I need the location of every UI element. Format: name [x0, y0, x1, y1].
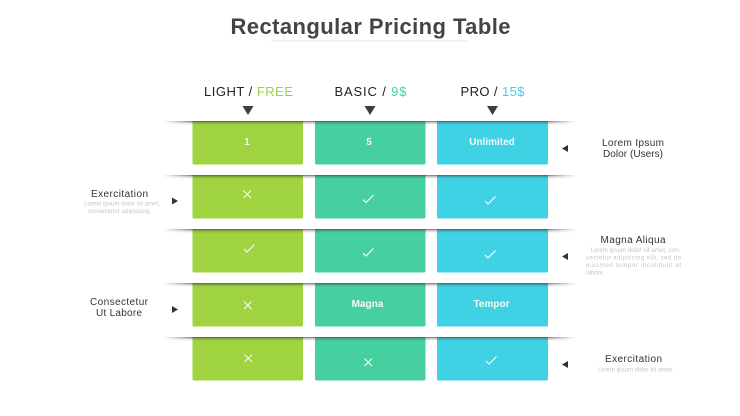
right label: magna aliqua: sectetur adipiscing elit, sed do [586, 256, 682, 262]
right label: users [602, 138, 664, 160]
left label: exercitation: Lorem ipsum dolor sit amet, [84, 202, 160, 208]
column header: basic [334, 84, 407, 115]
column header: pro: PRO / 15$ [460, 84, 525, 99]
arrow: consectetur [172, 306, 178, 313]
arrow: magna aliqua [562, 253, 568, 260]
left label: consectetur [90, 297, 149, 319]
column header: light: LIGHT / FREE [204, 84, 293, 99]
left label: exercitation: consectetur adipiscing. [88, 209, 151, 215]
right label: magna aliqua: Magna Aliqua [600, 235, 666, 246]
arrow: users [562, 145, 568, 152]
card values: Magna [352, 299, 384, 310]
card values: 1 [244, 137, 250, 148]
arrow: exercitation right [562, 361, 568, 368]
right label: magna aliqua [586, 235, 682, 276]
column: pro cards [437, 121, 548, 380]
column: basic cards [315, 121, 426, 380]
left label: consectetur: Ut Labore [96, 308, 142, 319]
right label: exercitation: Exercitation [605, 354, 662, 365]
left label: consectetur: Consectetur [90, 297, 149, 308]
title: Rectangular Pricing Table [230, 14, 510, 39]
card values: 5 [366, 137, 372, 148]
left label: exercitation: Exercitation [91, 189, 148, 200]
card values: Tempor [474, 299, 510, 310]
column header: basic: BASIC / 9$ [334, 84, 407, 99]
right label: magna aliqua: eiusmod tempor incididunt ut [586, 263, 681, 269]
cross icons [244, 190, 372, 366]
column: light cards [192, 121, 303, 380]
right label: magna aliqua: labore. [586, 270, 605, 276]
left label: exercitation [84, 189, 160, 215]
column header: light [204, 84, 293, 115]
infographic [84, 18, 681, 380]
card values: Unlimited [469, 137, 515, 148]
column header: pro [460, 84, 525, 115]
right label: users: Lorem Ipsum [602, 138, 664, 149]
arrow: exercitation [172, 198, 178, 204]
check icons [244, 195, 496, 364]
right label: users: Dolor (Users) [603, 149, 663, 160]
row shadows [163, 121, 577, 341]
right label: magna aliqua: Lorem ipsum dolor sit amet, con- [590, 248, 680, 254]
card values [244, 137, 515, 310]
right label: exercitation [598, 354, 674, 374]
right label: exercitation: Lorem ipsum dolor sit amet. [598, 368, 674, 374]
